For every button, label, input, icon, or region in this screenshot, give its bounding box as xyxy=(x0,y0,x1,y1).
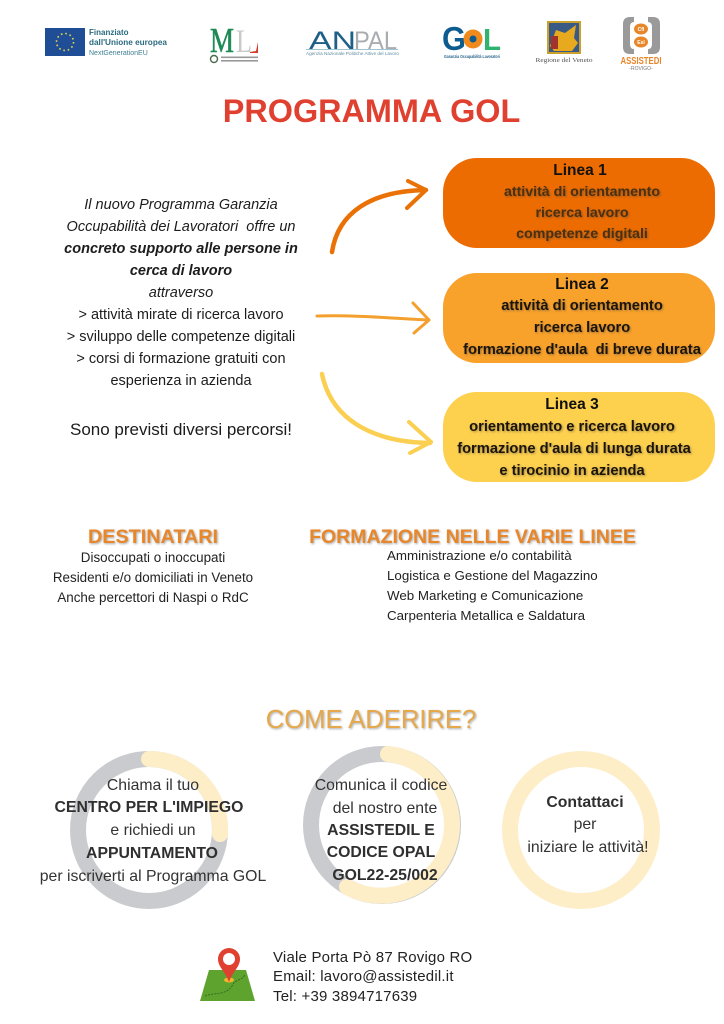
text block: contacts xyxy=(273,949,472,1005)
text block: Destinatari: Anche percettori di Naspi o RdC xyxy=(57,590,249,605)
text block: Destinatari: Disoccupati o inoccupati xyxy=(81,550,225,565)
text block: introduction: Occupabilità dei Lavoratori offre un xyxy=(67,219,295,235)
text block: contacts: Tel: +39 3894717639 xyxy=(273,988,417,1005)
text block: introduction: Sono previsti diversi percorsi! xyxy=(70,420,292,439)
arrow: to Linea 2 xyxy=(317,303,429,333)
heading: Destinatari: DESTINATARI xyxy=(88,526,218,548)
step 3: ring and text xyxy=(510,759,652,901)
logo: Assistedi Rovigo: Esl xyxy=(637,40,645,46)
logo: Assistedi Rovigo xyxy=(620,17,662,72)
step 3: ring and text: iniziare le attività! xyxy=(527,839,649,856)
logo: Ministero del Lavoro xyxy=(210,21,258,62)
text block: introduction: cerca di lavoro xyxy=(130,263,232,279)
logo: EU NextGenerationEU: Finanziato xyxy=(89,28,129,37)
panel: Linea 1: attività di orientamento xyxy=(504,184,660,200)
logo: Ministero del Lavoro: M xyxy=(210,21,234,60)
text block: Destinatari xyxy=(53,550,253,605)
logo: Assistedi Rovigo: ASSISTEDI xyxy=(620,55,662,67)
panel: Linea 3 xyxy=(443,392,715,482)
step 1: ring and text: CENTRO PER L'IMPIEGO xyxy=(55,799,243,816)
text block: Formazione: Logistica e Gestione del Magazzino xyxy=(387,568,598,583)
arrow: to Linea 1 xyxy=(332,181,426,252)
panel: Linea 1 xyxy=(443,158,715,248)
text block: introduction: attraverso xyxy=(149,285,213,301)
arrow: to Linea 3 xyxy=(322,374,431,453)
step 1: ring and text: Chiama il tuo xyxy=(107,777,199,794)
logo: Regione del Veneto xyxy=(536,21,592,64)
panel: Linea 2: Linea 2 xyxy=(555,276,609,293)
text block: contacts: Viale Porta Pò 87 Rovigo RO xyxy=(273,949,472,966)
logo: Ministero del Lavoro: L xyxy=(236,24,252,60)
text block: Formazione: Web Marketing e Comunicazione xyxy=(387,588,583,603)
logo: EU NextGenerationEU: dall'Unione europea xyxy=(89,38,167,47)
text block: Formazione: Carpenteria Metallica e Saldatura xyxy=(387,608,586,623)
step 3: ring and text: per xyxy=(574,816,596,833)
text block: Formazione xyxy=(387,548,598,623)
step 1: ring and text: e richiedi un xyxy=(110,822,196,839)
logo: Assistedi Rovigo: Cfl xyxy=(638,27,645,33)
step 2: ring and text: CODICE OPAL xyxy=(327,844,436,861)
heading: Formazione nelle varie linee: FORMAZIONE NELLE VARIE LINEE xyxy=(309,526,636,548)
logo: ANPAL: AN xyxy=(309,27,356,55)
logo: ANPAL: Agenzia Nazionale Politiche Attive del Lavoro xyxy=(306,51,400,56)
step 2: ring and text: ASSISTEDIL E xyxy=(327,822,435,839)
panel: Linea 3: Linea 3 xyxy=(545,396,599,413)
logo: Assistedi Rovigo: -ROVIGO- xyxy=(629,66,653,72)
panel: Linea 3: formazione d'aula di lunga durata xyxy=(457,441,692,457)
step 3: ring and text: Contattaci xyxy=(546,794,624,811)
icon: map pin xyxy=(200,948,255,1001)
text block: introduction: esperienza in azienda xyxy=(110,373,252,389)
logo: EU NextGenerationEU: NextGenerationEU xyxy=(89,50,148,57)
logo: GOL: Garanzia Occupabilità Lavoratori xyxy=(444,54,500,60)
panel: Linea 2: attività di orientamento xyxy=(501,298,663,314)
text block: introduction: Il nuovo Programma Garanzia xyxy=(84,197,278,213)
text block: introduction: > corsi di formazione gratuiti con xyxy=(76,351,286,367)
panel: Linea 2: formazione d'aula di breve durata xyxy=(463,342,702,358)
logo: GOL: L xyxy=(483,22,501,57)
panel: Linea 1: ricerca lavoro xyxy=(535,205,629,221)
heading: Come aderire: COME ADERIRE? xyxy=(266,706,476,734)
text block: contacts: Email: lavoro@assistedil.it xyxy=(273,968,454,985)
text block: introduction: > attività mirate di ricerca lavoro xyxy=(78,307,284,323)
text block: introduction xyxy=(64,197,298,439)
logo: ANPAL xyxy=(306,27,400,56)
step 1: ring and text: per iscriverti al Programma GOL xyxy=(40,868,266,885)
text block: introduction: concreto supporto alle persone in xyxy=(64,241,298,257)
panel: Linea 2: ricerca lavoro xyxy=(534,320,630,336)
panel: Linea 3: orientamento e ricerca lavoro xyxy=(469,419,675,435)
panel: Linea 3: e tirocinio in azienda xyxy=(499,463,645,479)
text block: Destinatari: Residenti e/o domiciliati in Veneto xyxy=(53,570,253,585)
logo: Regione del Veneto: Regione del Veneto xyxy=(536,58,592,64)
text block: introduction: > sviluppo delle competenze digitali xyxy=(67,329,295,345)
logo: GOL xyxy=(442,20,501,60)
panel: Linea 2 xyxy=(443,273,715,363)
step 2: ring and text: Comunica il codice xyxy=(315,777,448,794)
step 1: ring and text: APPUNTAMENTO xyxy=(86,845,218,862)
logo: ANPAL: PAL xyxy=(354,27,397,55)
title: PROGRAMMA GOL xyxy=(223,93,520,129)
step 1: ring and text xyxy=(40,759,266,901)
step 2: ring and text xyxy=(311,754,453,896)
logo: GOL: G xyxy=(442,20,466,57)
step 2: ring and text: GOL22-25/002 xyxy=(332,867,438,884)
panel: Linea 1: competenze digitali xyxy=(516,226,648,242)
text block: Formazione: Amministrazione e/o contabilità xyxy=(387,548,572,563)
step 2: ring and text: del nostro ente xyxy=(333,800,437,817)
panel: Linea 1: Linea 1 xyxy=(553,162,607,179)
logo: EU NextGenerationEU xyxy=(45,28,167,57)
